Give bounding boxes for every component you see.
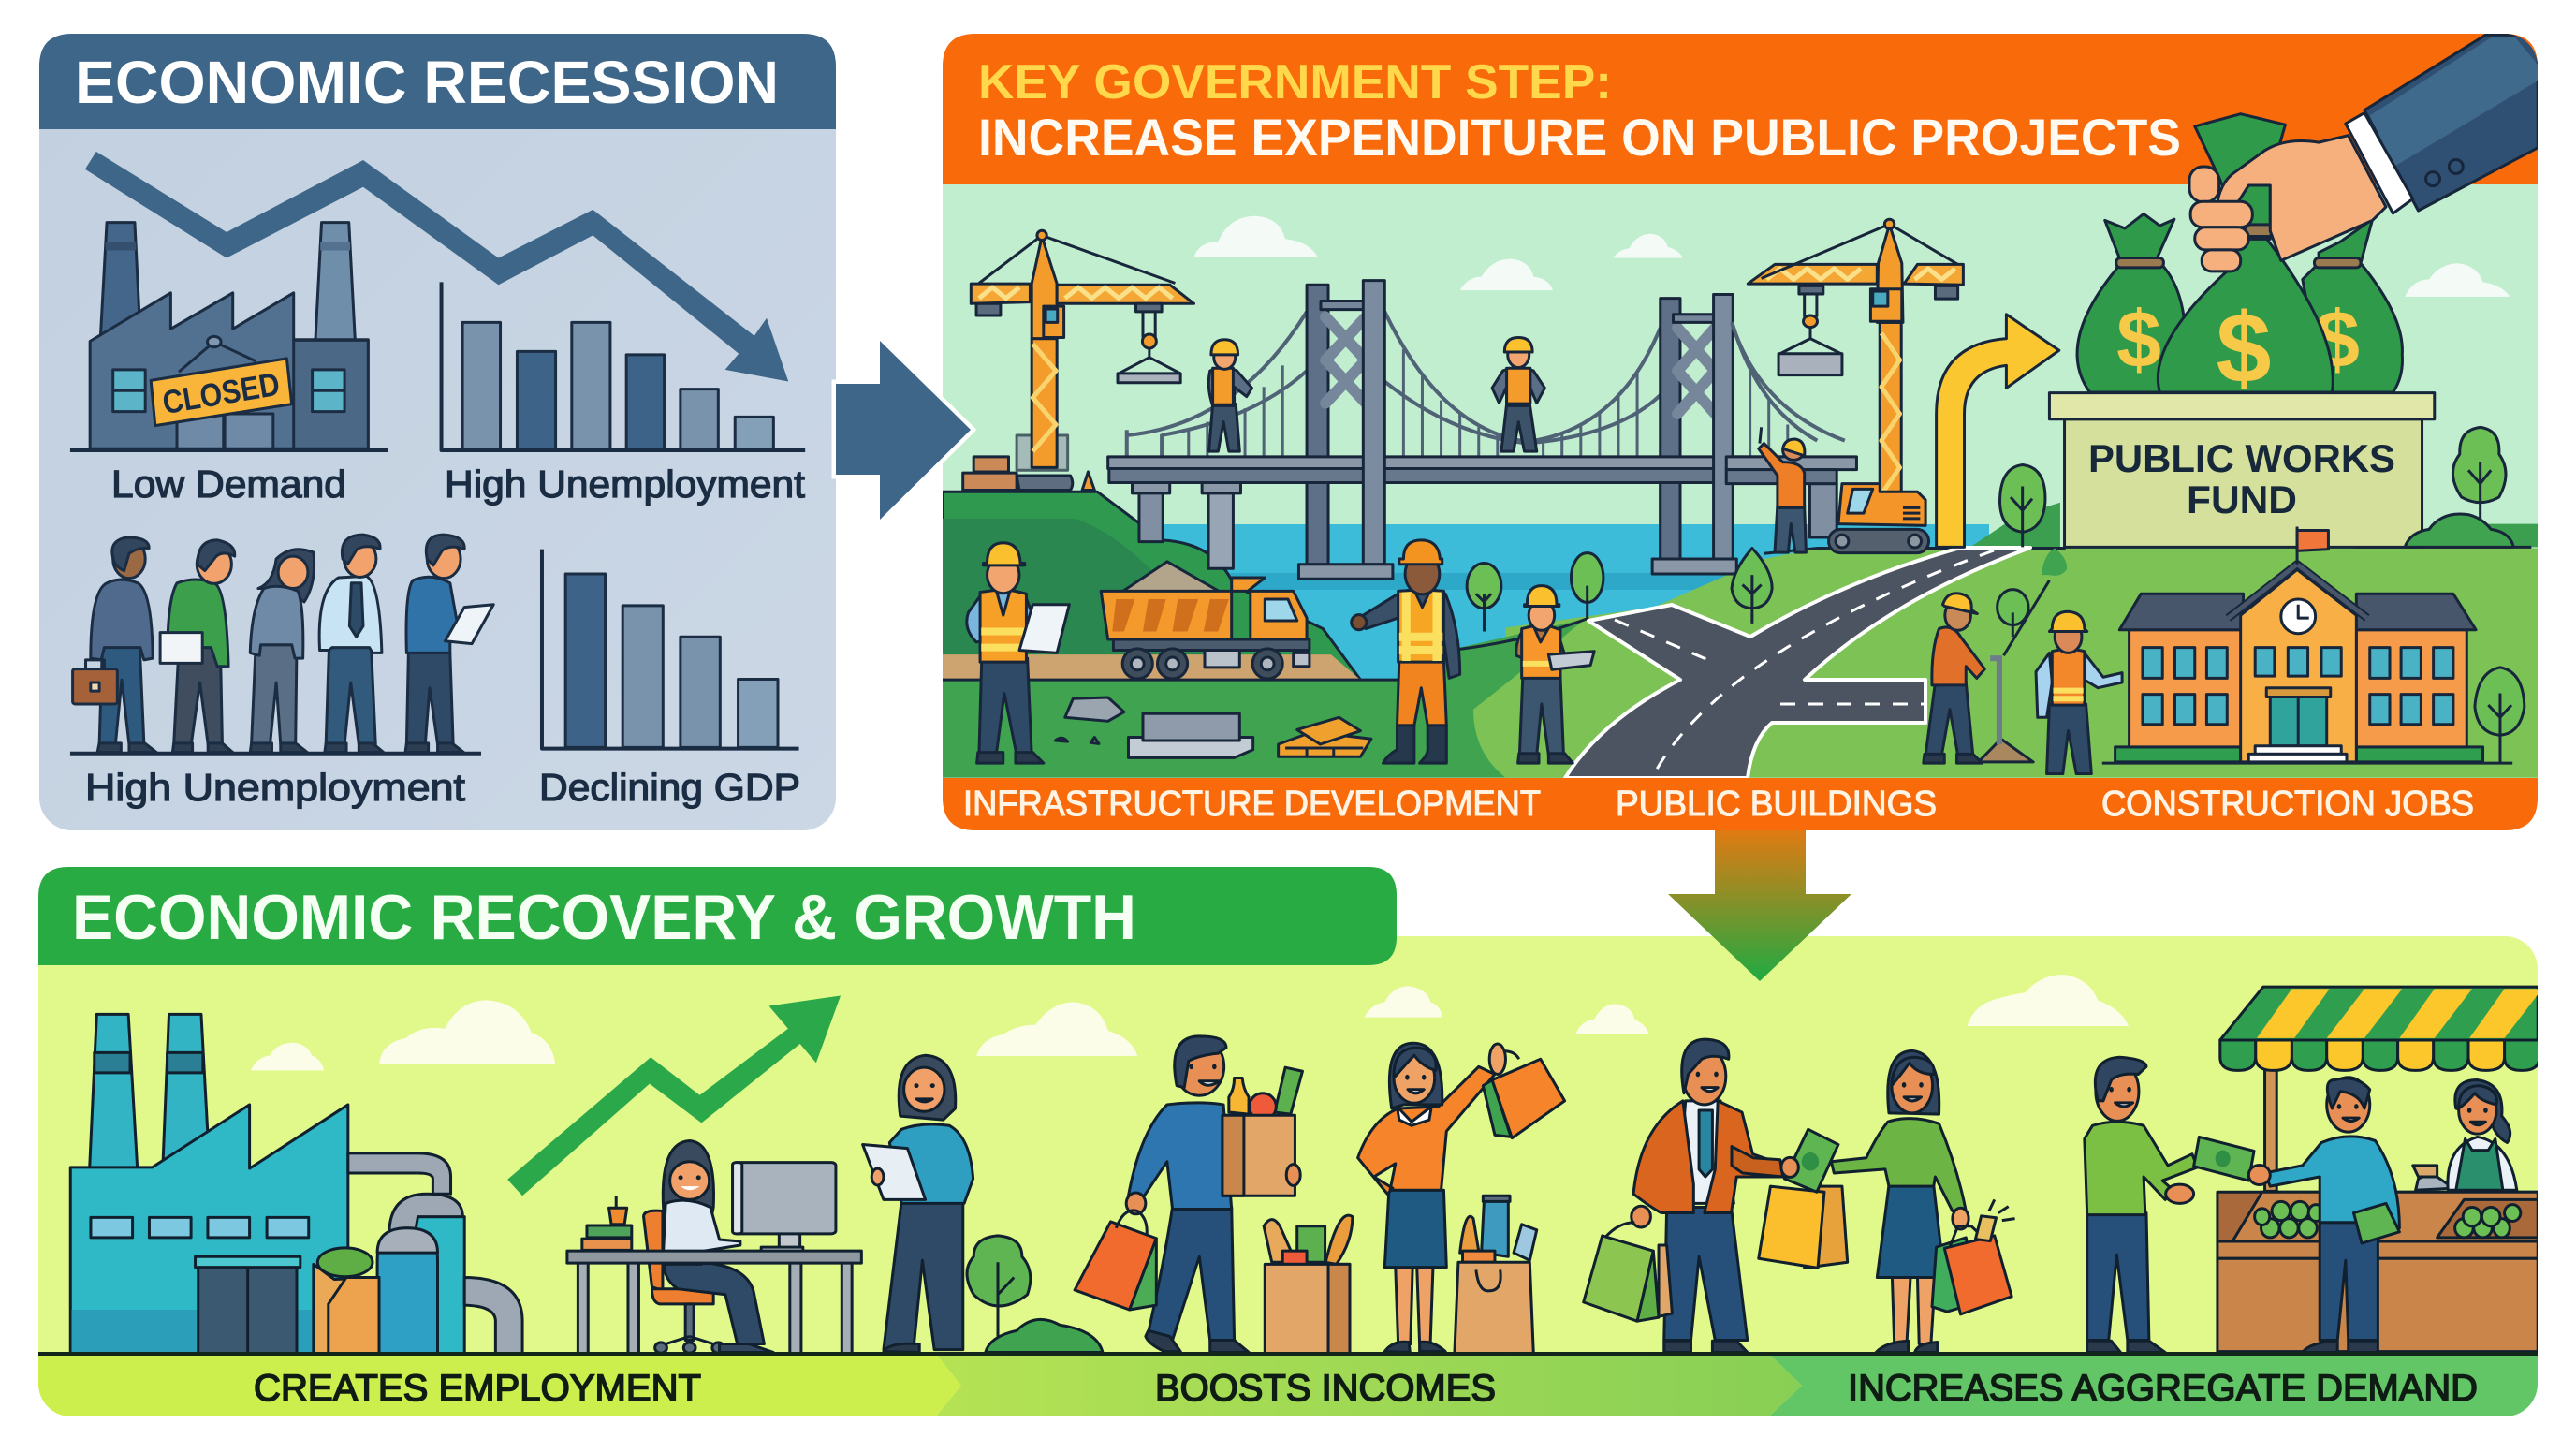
ground edge line xyxy=(1764,547,2531,553)
clouds xyxy=(1194,216,1683,290)
government step footer band xyxy=(943,778,2538,830)
shopper woman with raised bag xyxy=(1358,1043,1565,1352)
declining GDP bar chart xyxy=(542,550,799,749)
panel: economic recession xyxy=(39,34,836,830)
bag ties xyxy=(2116,258,2361,268)
shopper woman in green xyxy=(1831,1050,2015,1352)
hand xyxy=(2217,136,2386,260)
benefits strip xyxy=(38,1354,2538,1416)
second tower crane and excavator xyxy=(1748,219,1963,553)
dollar signs back: $ xyxy=(2315,295,2360,385)
dollar signs back xyxy=(2116,295,2360,385)
recovery panel background xyxy=(38,936,2538,1416)
scene: shoppers xyxy=(967,986,1795,1354)
left money bag xyxy=(2077,213,2186,392)
fund text line two: FUND xyxy=(2187,477,2297,521)
worker with clipboard xyxy=(967,543,1069,763)
cloud right xyxy=(2405,263,2510,297)
label: high unemployment (chart): High Unemployment xyxy=(445,462,806,506)
desk with computer xyxy=(567,1140,861,1354)
market stall xyxy=(2217,987,2539,1352)
left scene: bridge, crane, workers, truck xyxy=(943,216,2030,778)
public works fund building xyxy=(2049,393,2435,547)
recovery header xyxy=(38,867,1397,965)
dark green hill right edge xyxy=(2488,524,2538,547)
cash handed over xyxy=(1732,1129,1838,1192)
dollar signs back: $ xyxy=(2116,295,2161,385)
recession header band xyxy=(39,34,836,129)
standing woman with paper xyxy=(863,1055,973,1352)
recovery scene xyxy=(70,975,2539,1354)
scene: market exchange xyxy=(1732,975,2539,1352)
floor grocery bag two xyxy=(1455,1196,1537,1354)
worker with shovel xyxy=(1924,594,2033,763)
strip label: boosts incomes: BOOSTS INCOMES xyxy=(1155,1368,1496,1409)
unemployment bar chart xyxy=(442,282,805,450)
strip label: increases aggregate demand: INCREASES AGGREGATE DEMAND xyxy=(1848,1368,2478,1409)
closed sign text: CLOSED xyxy=(160,366,283,421)
upward yellow arrow xyxy=(1937,315,2059,547)
light green ground xyxy=(1505,548,2538,778)
tower crane xyxy=(963,230,1194,490)
shopper man handing cash xyxy=(1584,1039,1795,1352)
arrow: government step to recovery xyxy=(1668,830,1852,981)
strip segment: employment xyxy=(38,1354,961,1416)
floor grocery bag one xyxy=(1264,1215,1353,1354)
arrow: recession to government step xyxy=(836,341,971,520)
strip segment: demand xyxy=(1769,1354,2538,1416)
clouds xyxy=(976,986,1649,1056)
cuff xyxy=(2346,113,2413,213)
trees xyxy=(1467,553,1603,631)
footer label: construction jobs: CONSTRUCTION JOBS xyxy=(2101,785,2474,824)
yellow shopping bag xyxy=(1759,1186,1848,1268)
cuff buttons xyxy=(2426,159,2463,186)
queue of unemployed people xyxy=(70,535,493,754)
dump truck xyxy=(1101,562,1310,679)
fund text line one: PUBLIC WORKS xyxy=(2088,436,2395,480)
government step header band xyxy=(943,34,2538,184)
green growth arrow xyxy=(507,995,841,1196)
teal factory xyxy=(70,1014,522,1354)
label: low demand: Low Demand xyxy=(111,462,346,506)
falling trend arrow xyxy=(85,152,788,382)
building materials xyxy=(1055,697,1371,757)
heading: increase expenditure: INCREASE EXPENDITURE ON PUBLIC PROJECTS xyxy=(978,108,2181,167)
clouds xyxy=(251,1000,555,1070)
closed factory xyxy=(70,223,388,450)
shopper man with grocery bag xyxy=(1075,1036,1302,1352)
bag tie central xyxy=(2246,225,2273,237)
central money bag xyxy=(2158,237,2333,392)
right scene: crane, fund building, school xyxy=(1726,219,2525,774)
scene: factory and office xyxy=(70,995,973,1354)
bridge worker left xyxy=(1208,340,1252,451)
label: declining GDP: Declining GDP xyxy=(539,766,800,809)
buyer man in teal xyxy=(2248,1078,2399,1352)
bridge end and far worker xyxy=(1726,427,1856,552)
strip top line xyxy=(38,1352,2538,1356)
recession heading: ECONOMIC RECESSION xyxy=(75,49,779,116)
school building xyxy=(2102,527,2512,763)
water xyxy=(1156,524,1989,683)
government step sky background xyxy=(943,34,2538,830)
tree and bush xyxy=(967,1236,1103,1354)
panel: key government step xyxy=(943,34,2538,830)
panel: economic recovery and growth xyxy=(38,867,2539,1416)
construction scene xyxy=(943,216,2538,778)
suspension bridge xyxy=(1108,281,1817,579)
central dollar sign: $ xyxy=(2217,293,2271,404)
vendor woman behind stall xyxy=(2413,1080,2517,1190)
trees and shrubs xyxy=(1732,427,2525,763)
face details office worker xyxy=(679,1175,701,1190)
sleeve xyxy=(2364,35,2538,211)
label: high unemployment (people): High Unemployment xyxy=(85,766,466,809)
bag top held in fist xyxy=(2195,114,2285,239)
road xyxy=(1565,548,2030,778)
worker with tablet xyxy=(1516,586,1594,763)
cloud xyxy=(1967,975,2129,1026)
suspension cable right span xyxy=(1732,322,1845,441)
footer label: infrastructure development: INFRASTRUCTURE DEVELOPMENT xyxy=(963,785,1541,824)
dark green hill behind fund xyxy=(1969,503,2060,548)
bridge worker centre xyxy=(1492,337,1544,451)
strip label: creates employment: CREATES EMPLOYMENT xyxy=(254,1368,701,1409)
worker in orange overalls xyxy=(1352,540,1460,763)
recession panel background xyxy=(39,34,836,830)
road markings xyxy=(1615,550,1994,778)
right money bag xyxy=(2303,219,2402,392)
left hill and ground xyxy=(943,491,1589,778)
central money bag and hand xyxy=(2158,35,2538,392)
money bags back row xyxy=(2077,213,2402,392)
sleeve facet xyxy=(2370,37,2538,167)
worker pointing xyxy=(2036,611,2122,774)
fingers xyxy=(2189,167,2252,271)
heading: key government step: KEY GOVERNMENT STEP: xyxy=(978,55,1612,110)
recovery heading: ECONOMIC RECOVERY & GROWTH xyxy=(72,882,1136,953)
buyer man in green xyxy=(2085,1057,2254,1352)
footer label: public buildings: PUBLIC BUILDINGS xyxy=(1616,785,1937,824)
recession illustrations xyxy=(70,152,805,754)
strip segment: incomes xyxy=(936,1354,1802,1416)
right ground layer xyxy=(1505,503,2538,778)
